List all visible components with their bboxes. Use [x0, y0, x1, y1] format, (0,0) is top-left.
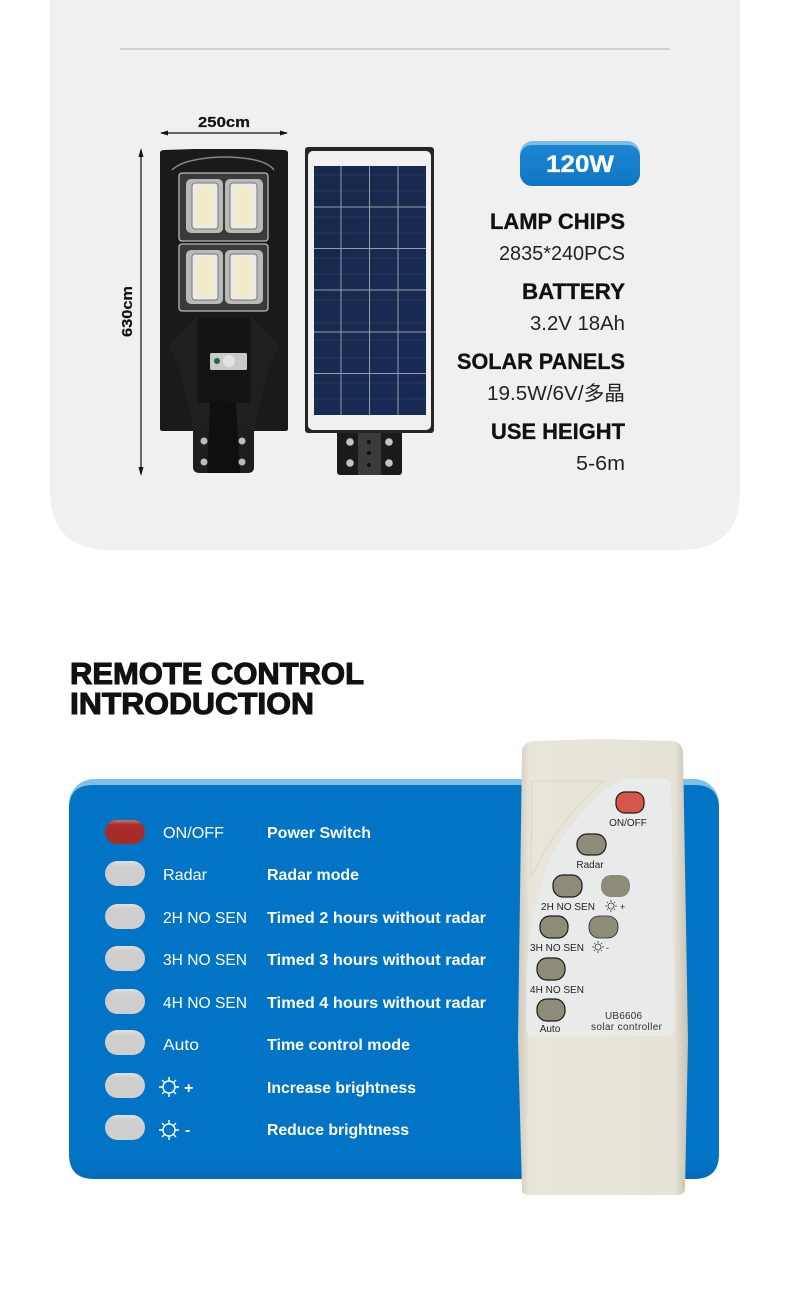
dimension: width 250cm: 250cm [198, 114, 250, 131]
row: Radar: Radar mode [267, 867, 359, 884]
dimension: height 630cm [119, 148, 144, 476]
model label: UB6606 [605, 1011, 642, 1022]
badge: 120W [520, 141, 640, 186]
row: 3H NO SEN: 3H NO SEN [163, 952, 247, 969]
button: ON/OFF [609, 792, 647, 829]
panel: product specification card [50, 0, 740, 550]
spec: lamp chips [490, 209, 625, 265]
button: brightness minus: - [606, 943, 609, 953]
button: ON/OFF: ON/OFF [609, 818, 647, 829]
badge: 120W: 120W [546, 151, 614, 178]
row: 2H NO SEN: Timed 2 hours without radar [267, 910, 486, 927]
row: reduce brightness: Reduce brightness [267, 1122, 409, 1139]
LED module lower [179, 244, 268, 311]
row: 2H NO SEN: 2H NO SEN [163, 910, 247, 927]
row: increase brightness: + [184, 1080, 193, 1097]
heading: remote control introduction: REMOTE CONTROL [70, 656, 364, 691]
button: 2H NO SEN [541, 875, 595, 913]
heading: remote control introduction: INTRODUCTION [70, 686, 314, 721]
spec: solar panels [457, 349, 625, 405]
spec: use height [491, 419, 626, 475]
row: Radar [105, 861, 359, 886]
row: reduce brightness [105, 1115, 409, 1140]
row: Auto: Time control mode [267, 1037, 410, 1054]
spec: solar panels: SOLAR PANELS [457, 349, 625, 374]
button: 4H NO SEN: 4H NO SEN [530, 985, 584, 996]
dimension: width 250cm [160, 114, 288, 136]
lamp front view [160, 149, 288, 473]
panel: remote button legend [69, 779, 719, 1179]
solar panel mount [337, 430, 402, 475]
radar sensor [210, 353, 247, 370]
remote control illustration [518, 739, 688, 1195]
button: 2H NO SEN: 2H NO SEN [541, 902, 595, 913]
button: Radar [576, 834, 606, 871]
row: increase brightness [105, 1073, 416, 1098]
dimension: height 630cm: 630cm [119, 286, 136, 337]
button: Radar: Radar [576, 860, 604, 871]
spec: solar panels: 19.5W/6V/多晶 [487, 382, 625, 405]
button: Auto: Auto [540, 1024, 561, 1035]
row: 4H NO SEN: Timed 4 hours without radar [267, 995, 486, 1012]
button: brightness minus [589, 916, 618, 953]
row: 4H NO SEN: 4H NO SEN [163, 995, 247, 1012]
model label [591, 1011, 663, 1033]
spec: lamp chips: LAMP CHIPS [490, 209, 625, 234]
row: ON/OFF [105, 820, 371, 844]
model label: solar controller [591, 1022, 663, 1033]
button: Auto [537, 999, 565, 1035]
row: ON/OFF: Power Switch [267, 825, 371, 842]
row: Radar: Radar [163, 867, 208, 884]
spec: use height: USE HEIGHT [491, 419, 626, 444]
row: 3H NO SEN: Timed 3 hours without radar [267, 952, 486, 969]
lamp lower body and mount [169, 318, 279, 473]
row: 2H NO SEN [105, 904, 486, 929]
row: Auto: Auto [163, 1037, 199, 1054]
spec: use height: 5-6m [576, 453, 625, 475]
button: brightness plus: + [620, 902, 625, 912]
heading: remote control introduction [70, 656, 364, 721]
row: Auto [105, 1030, 410, 1055]
row: ON/OFF: ON/OFF [163, 825, 224, 842]
row: reduce brightness: - [185, 1122, 190, 1139]
spec: battery: 3.2V 18Ah [530, 313, 625, 335]
button: 3H NO SEN: 3H NO SEN [530, 943, 584, 954]
spec: battery: BATTERY [522, 279, 625, 304]
row: 4H NO SEN [105, 989, 486, 1014]
row: increase brightness: Increase brightness [267, 1080, 416, 1097]
spec: battery [522, 279, 625, 335]
button: 4H NO SEN [530, 958, 584, 996]
spec: lamp chips: 2835*240PCS [499, 243, 625, 265]
button: brightness plus [601, 875, 630, 912]
LED module upper [179, 173, 268, 241]
solar panel rear view [305, 147, 434, 475]
row: 3H NO SEN [105, 946, 486, 971]
button: 3H NO SEN [530, 916, 584, 954]
